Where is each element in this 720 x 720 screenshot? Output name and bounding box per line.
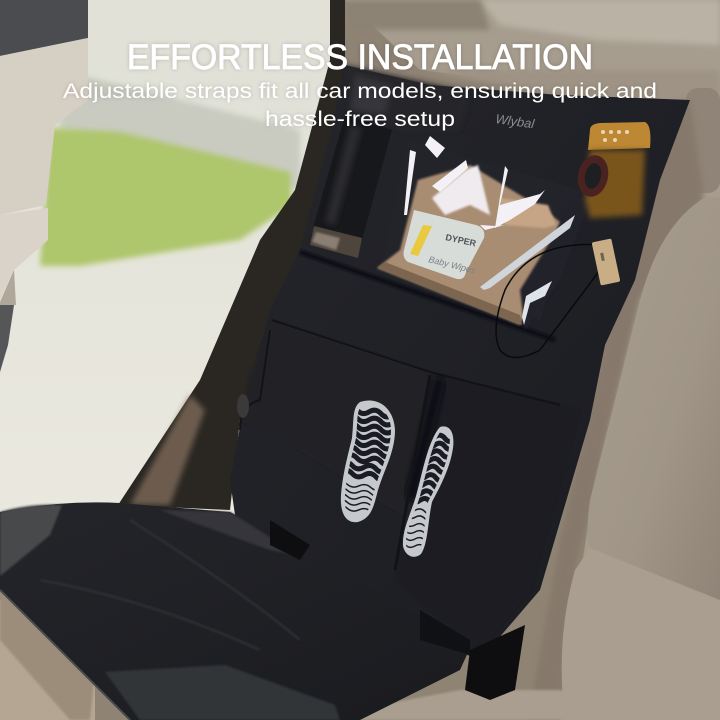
dark B-pillar / seat side (118, 0, 345, 510)
subtitle (63, 79, 657, 131)
floor sill lower (0, 600, 95, 720)
title: EFFORTLESS INSTALLATION (127, 38, 593, 77)
kraft bag (377, 165, 560, 325)
upper back section (230, 65, 690, 660)
hanging toys (574, 122, 650, 286)
door panel (0, 0, 88, 372)
cable (496, 245, 600, 358)
buckle (465, 625, 525, 700)
lower pocket panels (240, 320, 440, 520)
icon: right footprint (402, 426, 454, 557)
outside view through window (0, 0, 345, 520)
plastic glare streaks (404, 136, 575, 325)
subtitle: Adjustable straps fit all car models, ensuring quick and (63, 79, 657, 103)
brand logo: Wlybal (495, 111, 536, 132)
rear seat right side (345, 0, 720, 720)
wipes pack: DYPER (445, 232, 477, 249)
wipes pack (404, 210, 484, 279)
water bottle (310, 115, 392, 258)
subtitle: hassle-free setup (265, 107, 455, 131)
seat cushion bottom mat (0, 502, 470, 720)
wipes pack: Baby Wipes (428, 254, 477, 276)
icon: left footprint (335, 400, 395, 522)
top folds highlight (345, 65, 470, 130)
clear pocket with wipes (377, 136, 600, 358)
